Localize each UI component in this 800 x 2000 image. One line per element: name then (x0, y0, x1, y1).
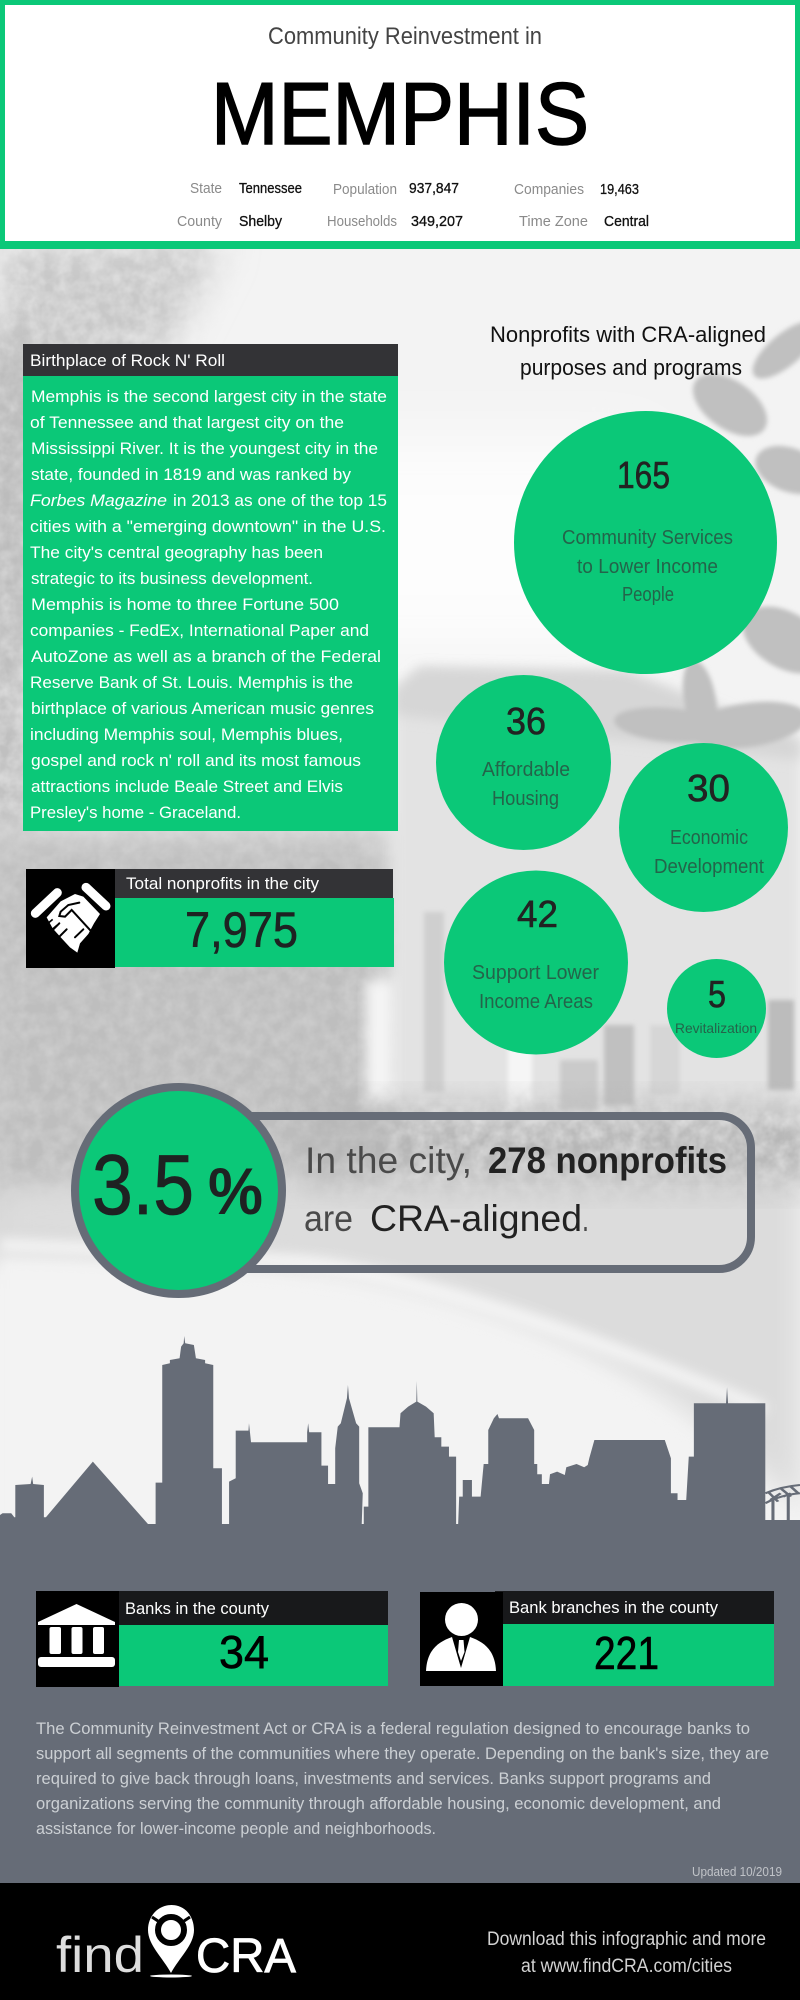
bubble: economic development (619, 743, 788, 912)
city facts: County (177, 213, 222, 230)
stat value: 7,975 (185, 902, 298, 958)
panel body text: including Memphis soul, Memphis blues, (30, 725, 343, 744)
panel body text: in 2013 as one of the top 15 (173, 491, 387, 510)
bubble: economic development: 30 (687, 768, 730, 810)
bubble: revitalization (667, 959, 766, 1058)
percentage: 3.5 (92, 1138, 194, 1233)
icon: handshake (35, 887, 106, 953)
callout text: 278 nonprofits (488, 1140, 727, 1181)
city facts: State (190, 180, 222, 197)
paragraph: what the CRA is (36, 1719, 769, 1838)
icon: businessperson (426, 1603, 496, 1671)
panel body text: Memphis is the second largest city in the state (31, 387, 387, 406)
paragraph: what the CRA is: support all segments of the communities where they operate. Depending on the bank's size, they are (36, 1744, 769, 1763)
callout: 3.5 percent CRA-aligned (75, 1087, 751, 1294)
city facts: Households (327, 213, 397, 230)
callout text: are (304, 1198, 353, 1239)
panel heading: Birthplace of Rock N' Roll (30, 351, 225, 370)
panel body text: strategic to its business development. (31, 569, 313, 588)
panel body text: cities with a "emerging downtown" in the U.S. (30, 517, 386, 536)
paragraph: what the CRA is: assistance for lower-income people and neighborhoods. (36, 1819, 436, 1838)
bubble: community services: to Lower Income (577, 556, 718, 578)
panel body text: Memphis is home to three Fortune 500 (31, 595, 339, 614)
panel body text: state, founded in 1819 and was ranked by (31, 465, 352, 484)
download note (487, 1929, 766, 1977)
percentage: % (208, 1154, 263, 1228)
bubble: support lower income areas (444, 870, 628, 1054)
bubble: affordable housing: Housing (492, 788, 559, 810)
city facts: Shelby (239, 213, 282, 230)
bubble: community services: Community Services (562, 527, 733, 549)
bubble: economic development: Economic (670, 827, 748, 849)
city facts: Population (333, 181, 397, 198)
paragraph: what the CRA is: required to give back through loans, investments and services. Banks support programs and (36, 1769, 711, 1788)
header panel (0, 2, 800, 249)
bubble: support lower income areas: 42 (517, 894, 558, 936)
bubble: community services (514, 411, 777, 674)
bubble: support lower income areas: Income Areas (479, 991, 593, 1013)
panel body text: attractions include Beale Street and Elvis (31, 777, 343, 796)
icon: bank (38, 1604, 115, 1667)
city facts: 937,847 (409, 180, 459, 197)
panel body text: Presley's home - Graceland. (30, 803, 241, 822)
city facts: Time Zone (519, 213, 588, 230)
callout text (304, 1140, 727, 1239)
callout text: In the city, (305, 1140, 472, 1181)
bubble: support lower income areas: Support Lower (472, 962, 599, 984)
heading: nonprofits with CRA-aligned purposes: purposes and programs (520, 355, 742, 380)
skyline silhouette (0, 1336, 800, 1560)
heading: nonprofits with CRA-aligned purposes: Nonprofits with CRA-aligned (490, 322, 766, 347)
stat label: Banks in the county (125, 1599, 269, 1618)
paragraph: what the CRA is: The Community Reinvestment Act or CRA is a federal regulation designed to encourage banks to (36, 1719, 750, 1738)
lower slate panel (0, 1555, 800, 1883)
background photo of a mansion, faded grey (0, 240, 800, 1560)
updated date: Updated 10/2019 (692, 1864, 782, 1879)
icon: map pin (148, 1905, 194, 1978)
city facts: Central (604, 213, 649, 230)
bubble: affordable housing: 36 (506, 701, 546, 743)
city facts: 349,207 (411, 213, 463, 230)
bubble: economic development: Development (654, 856, 764, 878)
panel body text: of Tennessee and that largest city on the (30, 413, 344, 432)
panel body text: AutoZone as well as a branch of the Federal (31, 647, 381, 666)
city facts: 19,463 (600, 181, 639, 198)
panel body text: gospel and rock n' roll and its most famous (31, 751, 361, 770)
paragraph: what the CRA is: organizations serving the community through affordable housing, economic development, and (36, 1794, 721, 1813)
panel body text: birthplace of various American music genres (31, 699, 374, 718)
panel body text: The city's central geography has been (30, 543, 323, 562)
panel body text: Forbes Magazine (30, 491, 167, 510)
heading: nonprofits with CRA-aligned purposes (490, 322, 766, 380)
bubble: revitalization: Revitalization (675, 1020, 757, 1036)
bubble: revitalization: 5 (708, 974, 726, 1016)
panel body text: companies - FedEx, International Paper and (30, 621, 369, 640)
footer (0, 1883, 800, 2000)
stat label: Bank branches in the county (509, 1598, 718, 1617)
panel body text (30, 387, 387, 822)
stat: total nonprofits (26, 869, 394, 968)
download note: at www.findCRA.com/cities (521, 1956, 732, 1977)
logo: findCRA: CRA (196, 1930, 296, 1983)
bubble: community services: 165 (617, 455, 670, 497)
bubble: affordable housing: Affordable (482, 759, 570, 781)
stat: bank branches in the county (420, 1591, 774, 1686)
callout text: CRA-aligned (370, 1198, 582, 1239)
stat value: 221 (594, 1627, 659, 1679)
bridge (765, 1485, 800, 1522)
stat value: 34 (219, 1626, 269, 1678)
city facts: Tennessee (239, 180, 302, 197)
stat label: Total nonprofits in the city (126, 874, 319, 893)
bubble: community services: People (622, 584, 674, 606)
city name: MEMPHIS (211, 64, 589, 163)
callout text: . (582, 1198, 589, 1239)
panel body text: Mississippi River. It is the youngest city in the (31, 439, 378, 458)
logo: findCRA (56, 1905, 296, 1983)
city facts (177, 180, 649, 230)
stat: banks in the county (36, 1591, 388, 1687)
bubble: affordable housing (436, 675, 611, 850)
download note: Download this infographic and more (487, 1929, 766, 1950)
panel body text: Reserve Bank of St. Louis. Memphis is the (30, 673, 353, 692)
title line: Community Reinvestment in (268, 23, 542, 50)
logo: findCRA: find (56, 1927, 144, 1983)
city facts: Companies (514, 181, 584, 198)
percentage (92, 1138, 263, 1233)
panel: birthplace of rock n' roll (23, 344, 398, 831)
